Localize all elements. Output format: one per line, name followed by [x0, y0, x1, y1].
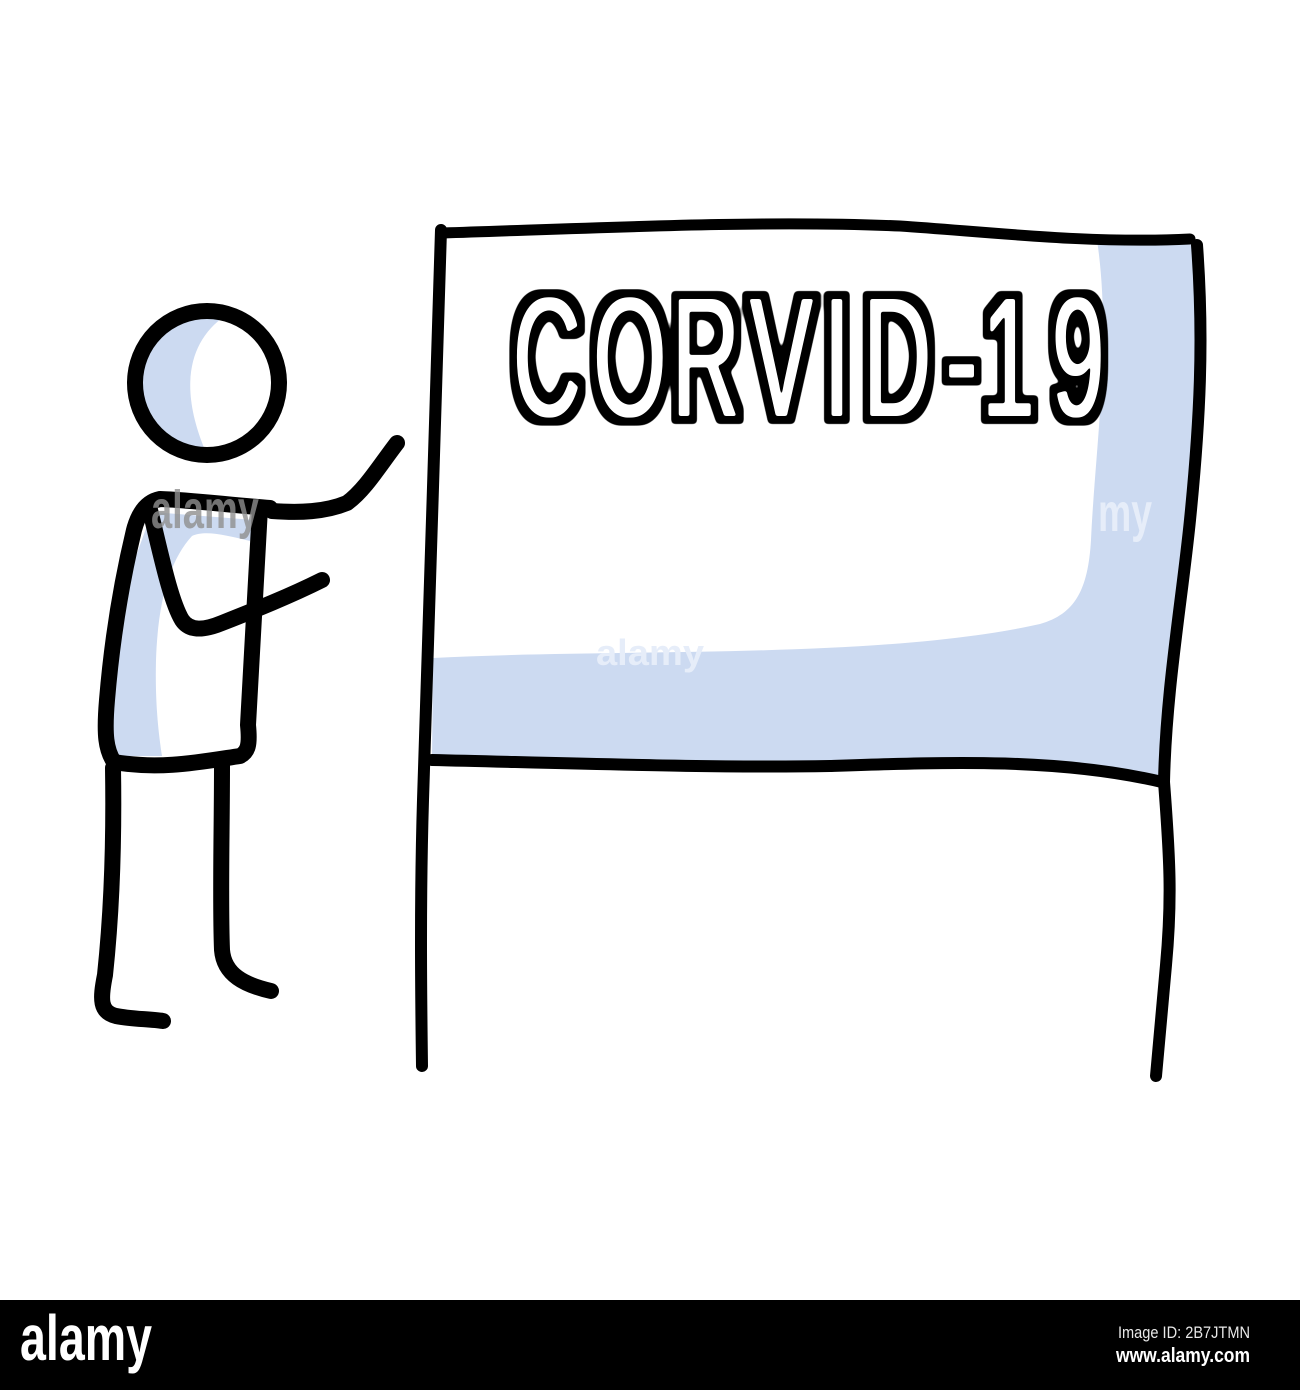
watermark fragments — [151, 480, 1152, 673]
watermark on board right: my — [1098, 483, 1152, 543]
icon: stick figure presenter — [102, 311, 397, 1021]
board blue shading — [432, 240, 1201, 782]
lower arm — [150, 510, 322, 629]
left leg — [102, 768, 163, 1021]
board left post — [421, 230, 441, 1066]
footer url: www.alamy.com — [1115, 1345, 1250, 1367]
right leg — [221, 765, 271, 991]
footer bar — [0, 1300, 1300, 1390]
board right post — [1156, 245, 1201, 1076]
footer logo: alamy — [20, 1302, 152, 1374]
body outline — [106, 499, 270, 765]
body shading — [108, 512, 254, 756]
title lettering: CORVID-19 — [513, 264, 1104, 453]
raised arm — [272, 443, 397, 512]
board top edge — [443, 224, 1190, 240]
board bottom edge — [432, 760, 1162, 782]
watermark on board lower: alamy — [596, 632, 704, 673]
panel: presentation board — [421, 224, 1201, 1076]
head shading — [135, 315, 225, 450]
head — [135, 311, 279, 455]
footer image id: Image ID: 2B7JTMN — [1118, 1323, 1250, 1342]
watermark on figure: alamy — [151, 480, 259, 540]
